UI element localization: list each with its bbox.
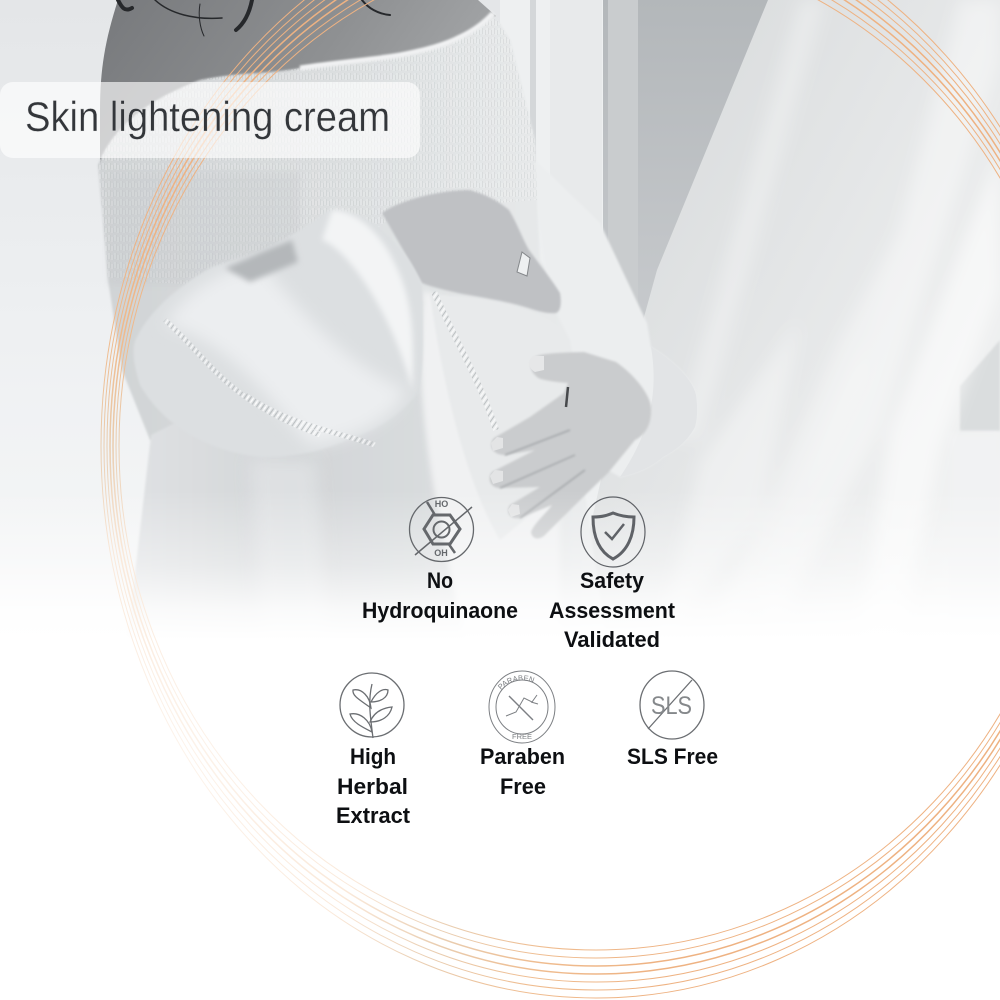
badge: no hydroquinone (362, 498, 518, 623)
icon: leafy sprig (340, 673, 404, 738)
belly (430, 295, 581, 540)
badge: paraben free: Paraben (480, 744, 565, 769)
sheer curtain (560, 0, 1000, 660)
badge: paraben free: Free (500, 774, 546, 799)
badge: no hydroquinone: Hydroquinaone (362, 598, 518, 623)
icon: paraben-free seal: FREE (512, 732, 532, 741)
upper hand (382, 190, 561, 313)
curtain streaks (660, 0, 1000, 640)
badge: safety assessment validated: Assessment (549, 598, 676, 623)
bare back (100, 0, 496, 170)
lower hand (490, 352, 651, 538)
icon: paraben-free seal: PARABEN (498, 675, 534, 690)
badge: SLS free (627, 671, 718, 769)
badge: safety assessment validated (549, 497, 676, 652)
icon: benzene ring crossed out: HO (435, 499, 448, 509)
badge: high herbal extract: Extract (336, 803, 411, 828)
grey wall (603, 0, 823, 520)
icon: shield with check (581, 497, 645, 567)
badge: safety assessment validated: Validated (564, 627, 660, 652)
fade to white (0, 490, 1000, 640)
sleeve cuff (134, 210, 423, 457)
icon: benzene ring crossed out (410, 498, 474, 562)
icon: benzene ring crossed out: OH (434, 548, 448, 558)
badge: no hydroquinone: No (427, 568, 453, 593)
badge: safety assessment validated: Safety (580, 568, 645, 593)
title banner (0, 82, 420, 158)
badge: paraben free (480, 670, 565, 799)
badge: high herbal extract (336, 673, 411, 828)
title text: Skin lightening cream (25, 93, 390, 140)
icon: SLS crossed out: SLS (651, 692, 692, 720)
badge: high herbal extract: High (350, 744, 396, 769)
badge: SLS free: SLS Free (627, 744, 718, 769)
right sleeve (535, 160, 697, 477)
dress skirt (125, 300, 610, 660)
icon: paraben-free seal (488, 670, 556, 744)
window frame (500, 0, 610, 660)
dress bodice (98, 13, 590, 440)
badge: high herbal extract: Herbal (337, 774, 408, 799)
hair (118, 0, 390, 36)
